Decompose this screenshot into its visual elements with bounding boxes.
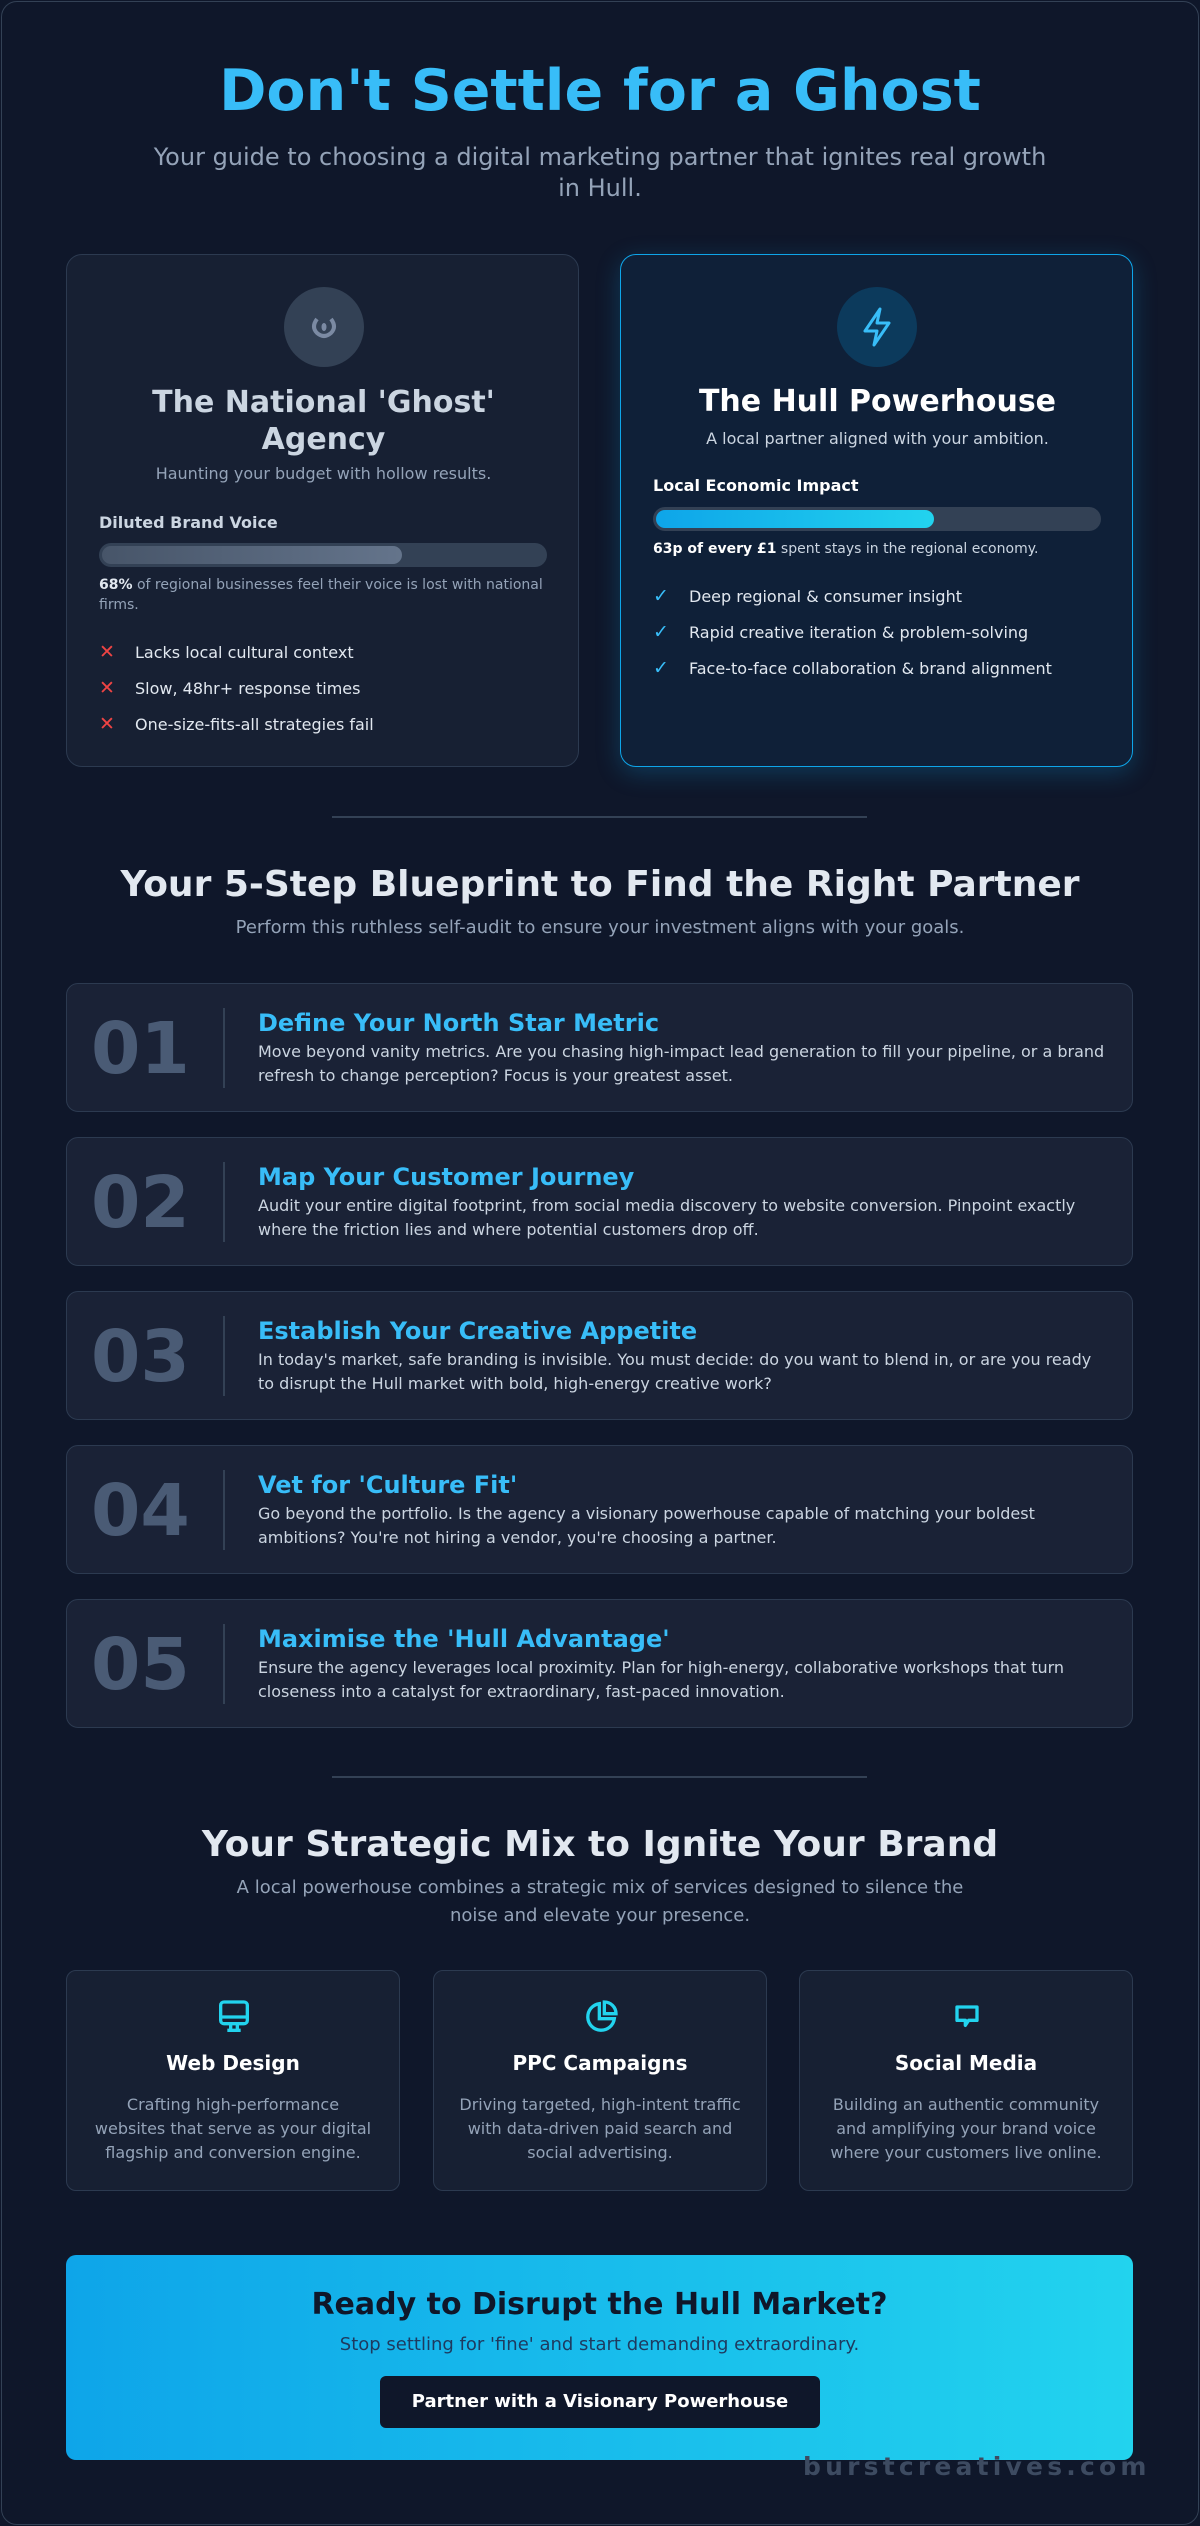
step 02: 02 xyxy=(91,1161,190,1244)
heading: The National 'Ghost' xyxy=(152,385,495,420)
service: web design: Web Design xyxy=(166,2051,300,2075)
icon: ghost xyxy=(284,287,364,367)
step 02: Map Your Customer Journey xyxy=(258,1163,634,1191)
strategic mix subtitle: A local powerhouse combines a strategic mix of services designed to silence the noise and elevate your presence. xyxy=(237,1877,963,1926)
list: ✓ xyxy=(653,621,669,643)
step 01 xyxy=(66,983,1133,1112)
service: social: Building an authentic community and amplifying your brand voice where your customers live online. xyxy=(830,2095,1102,2162)
step 02 xyxy=(66,1137,1133,1266)
bar xyxy=(653,507,1101,531)
step 01: Move beyond vanity metrics. Are you chasing high-impact lead generation to fill your pipeline, or a brand refresh to change perception? Focus is your greatest asset. xyxy=(258,1042,1104,1085)
service: social: Social Media xyxy=(895,2051,1037,2075)
heading: The Hull Powerhouse xyxy=(699,384,1056,419)
step 03: 03 xyxy=(91,1315,190,1398)
service: web design xyxy=(66,1970,400,2191)
tagline: Haunting your budget with hollow results. xyxy=(156,464,491,483)
title: Don't Settle for a Ghost xyxy=(219,58,981,124)
icon: lightning xyxy=(837,287,917,367)
step 04: Vet for 'Culture Fit' xyxy=(258,1471,517,1499)
step 03: In today's market, safe branding is invisible. You must decide: do you want to blend in, or are you ready to disrupt the Hull market with bold, high-energy creative work? xyxy=(258,1350,1091,1393)
heading: blueprint: Your 5-Step Blueprint to Find the Right Partner xyxy=(120,864,1080,905)
list: Lacks local cultural context xyxy=(135,643,354,662)
blueprint subtitle: Perform this ruthless self-audit to ensure your investment aligns with your goals. xyxy=(236,917,964,938)
step 05: Ensure the agency leverages local proximity. Plan for high-energy, collaborative workshops that turn closeness into a catalyst for extraordinary, fast-paced innovation. xyxy=(258,1658,1064,1701)
step 04 xyxy=(66,1445,1133,1574)
list: One-size-fits-all strategies fail xyxy=(135,715,374,734)
step 01: 01 xyxy=(91,1007,190,1090)
list: ✕ xyxy=(99,677,115,699)
service: social xyxy=(799,1970,1133,2191)
list: ✓ xyxy=(653,585,669,607)
step 05: Maximise the 'Hull Advantage' xyxy=(258,1625,670,1653)
cta button xyxy=(380,2376,820,2428)
step 03 xyxy=(66,1291,1133,1420)
panel: hull powerhouse xyxy=(620,254,1133,767)
service: ppc: PPC Campaigns xyxy=(512,2051,688,2075)
cta button: Partner with a Visionary Powerhouse xyxy=(412,2391,788,2412)
list: Rapid creative iteration & problem-solving xyxy=(689,623,1028,642)
heading: strategic mix: Your Strategic Mix to Ignite Your Brand xyxy=(202,1824,998,1865)
heading xyxy=(152,385,495,457)
panel: national ghost agency xyxy=(66,254,579,767)
service: ppc: Driving targeted, high-intent traffic with data-driven paid search and social advertising. xyxy=(459,2095,741,2162)
subtitle: Your guide to choosing a digital marketing partner that ignites real growth in Hull. xyxy=(154,143,1046,202)
list xyxy=(99,641,374,735)
step 01: Define Your North Star Metric xyxy=(258,1009,659,1037)
service: ppc xyxy=(433,1970,767,2191)
list: Face-to-face collaboration & brand alignment xyxy=(689,659,1052,678)
heading: Agency xyxy=(262,422,385,457)
list: Slow, 48hr+ response times xyxy=(135,679,360,698)
tagline: A local partner aligned with your ambition. xyxy=(706,429,1049,448)
list xyxy=(653,585,1052,679)
stat: 68% of regional businesses feel their voice is lost with national firms. xyxy=(99,577,543,613)
step 05 xyxy=(66,1599,1133,1728)
step 05: 05 xyxy=(91,1623,190,1706)
step 03: Establish Your Creative Appetite xyxy=(258,1317,697,1345)
step 02: Audit your entire digital footprint, from social media discovery to website conversion. Pinpoint exactly where the friction lies and where potential customers drop off. xyxy=(258,1196,1075,1239)
list: Deep regional & consumer insight xyxy=(689,587,962,606)
bar xyxy=(99,543,547,567)
label: Local Economic Impact xyxy=(653,476,859,495)
cta banner xyxy=(66,2255,1133,2460)
cta text: Stop settling for 'fine' and start demanding extraordinary. xyxy=(340,2334,859,2355)
list: ✓ xyxy=(653,657,669,679)
label: Diluted Brand Voice xyxy=(99,513,278,532)
watermark: burstcreatives.com xyxy=(803,2452,1151,2481)
list: ✕ xyxy=(99,641,115,663)
list: ✕ xyxy=(99,713,115,735)
step 04: 04 xyxy=(91,1469,190,1552)
stat: 63p of every £1 spent stays in the regional economy. xyxy=(653,541,1038,557)
step 04: Go beyond the portfolio. Is the agency a visionary powerhouse capable of matching your boldest ambitions? You're not hiring a vendor, you're choosing a partner. xyxy=(258,1504,1035,1547)
cta heading: Ready to Disrupt the Hull Market? xyxy=(311,2287,888,2322)
service: web design: Crafting high-performance websites that serve as your digital flagship and conversion engine. xyxy=(95,2095,371,2162)
